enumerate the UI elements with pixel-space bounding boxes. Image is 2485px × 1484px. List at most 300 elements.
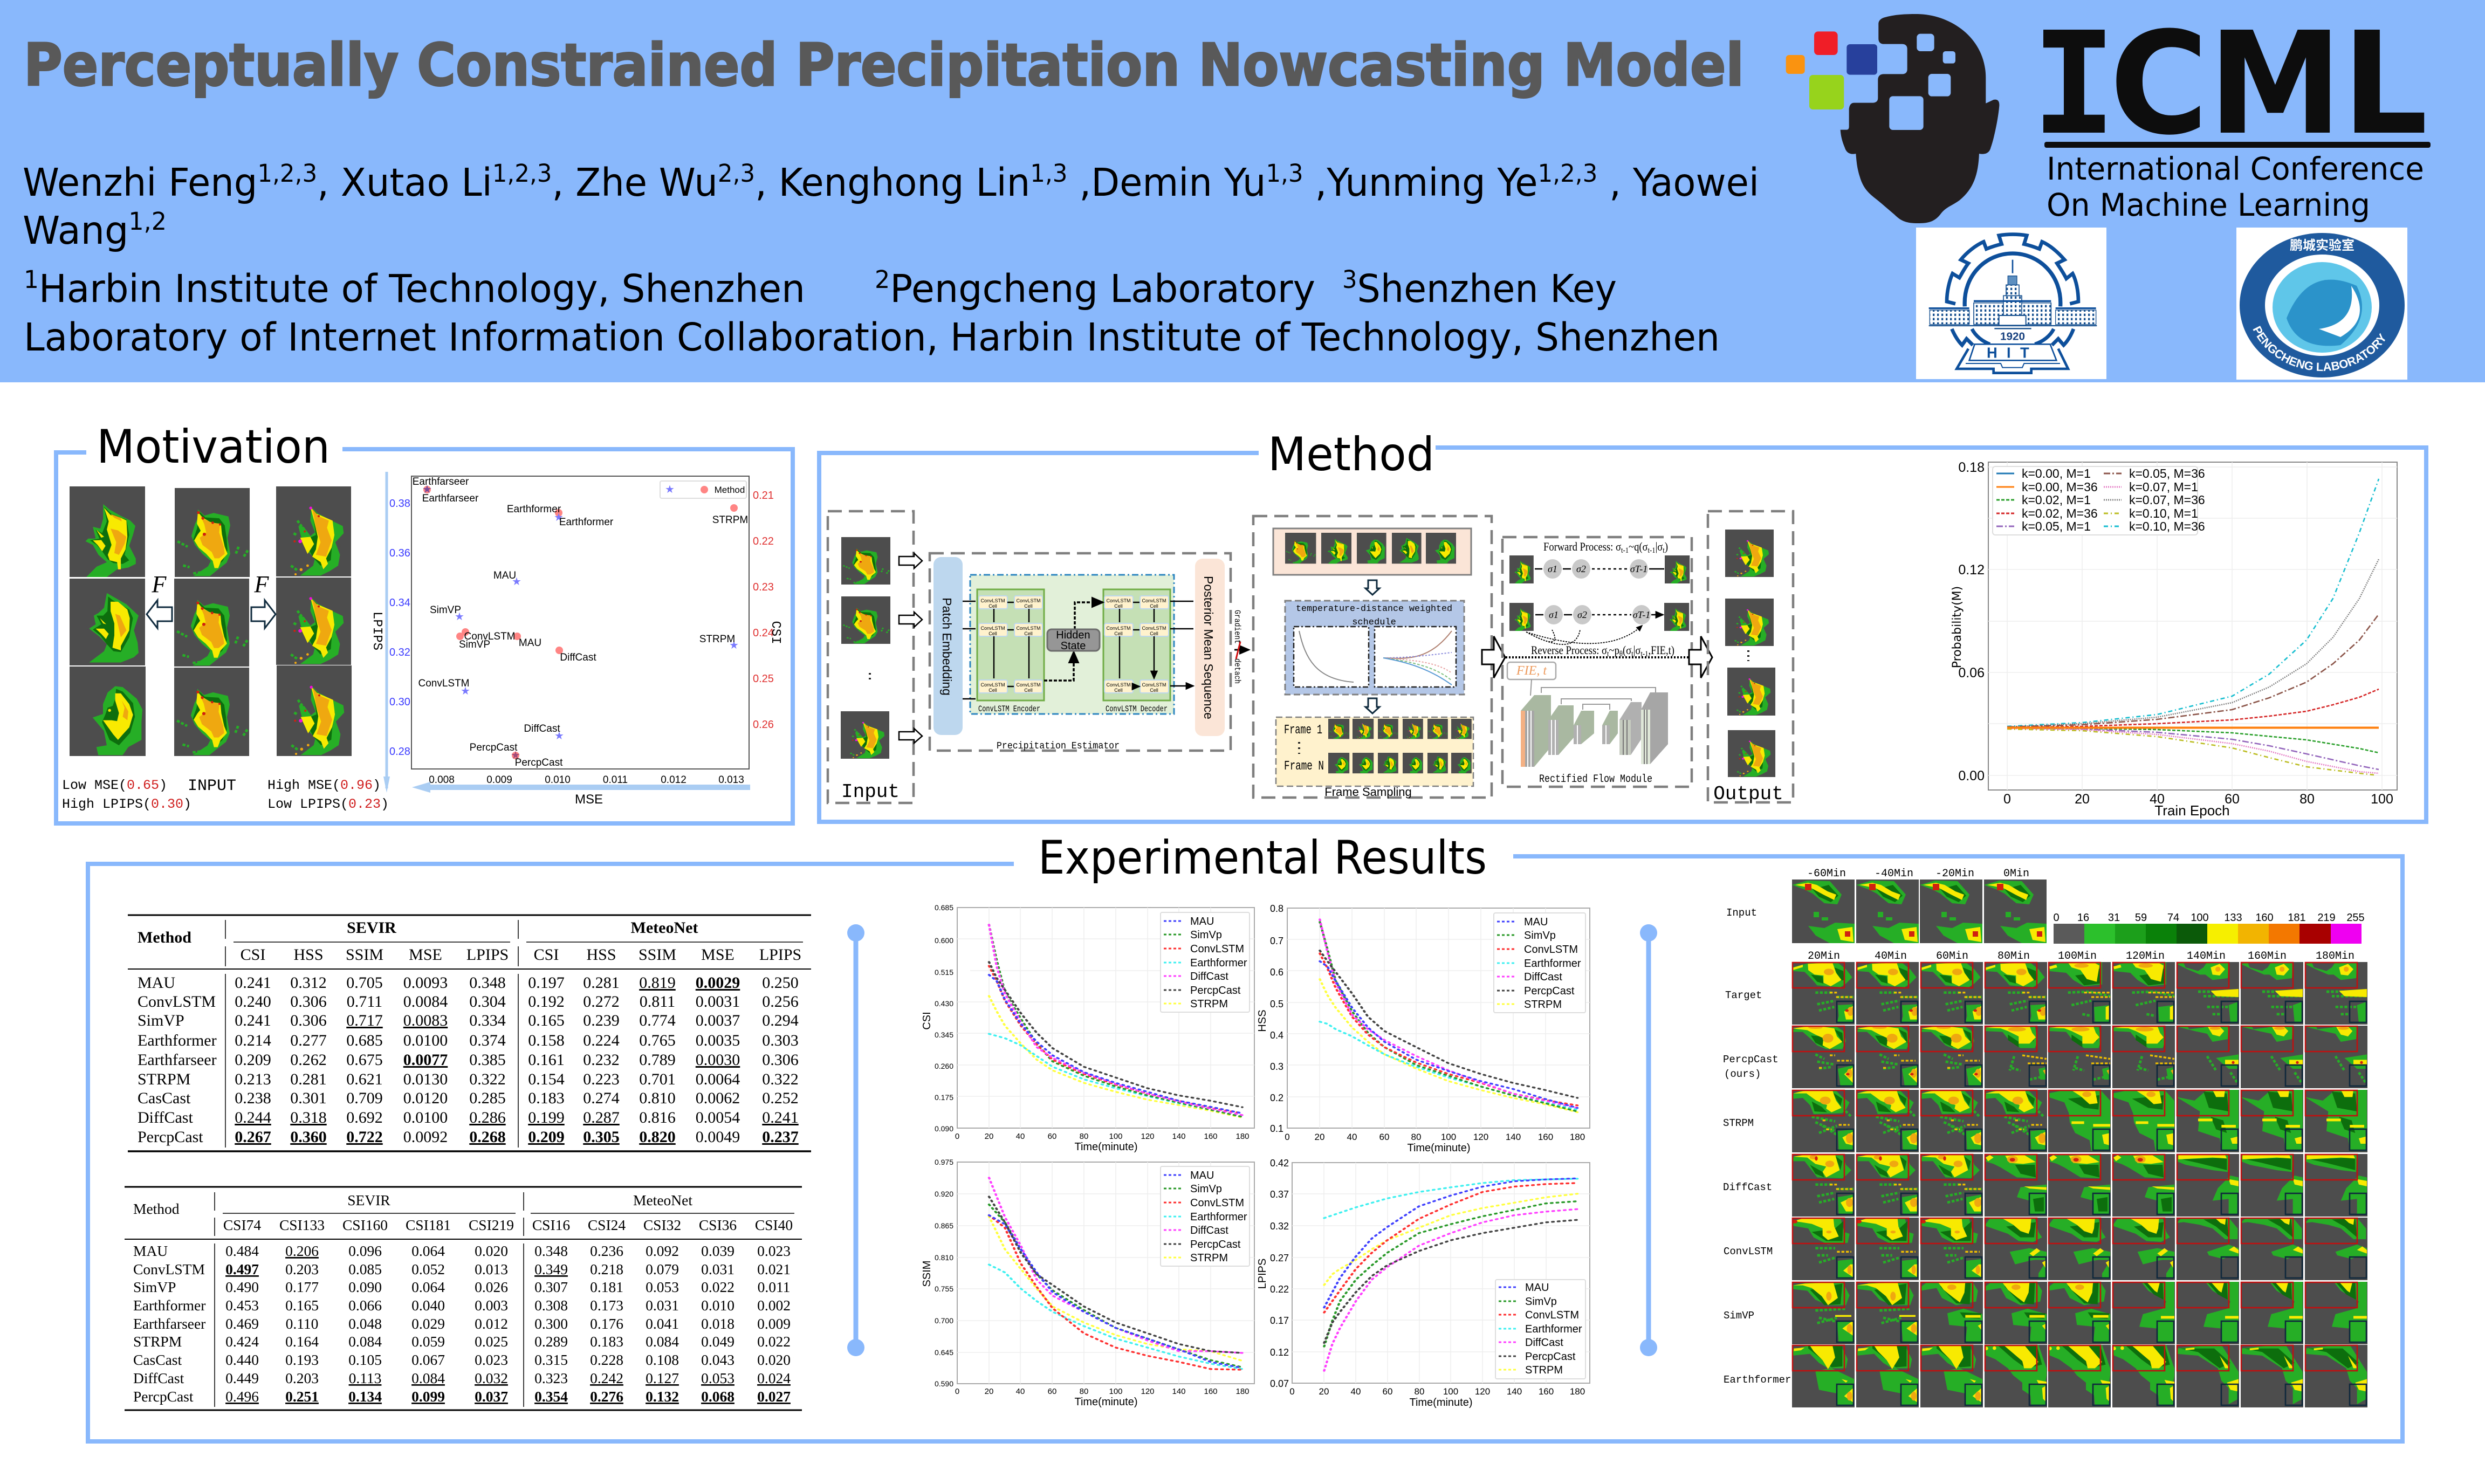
line chart: HSS — [1257, 903, 1590, 1154]
row MAU: MAU — [133, 1242, 168, 1259]
line chart: SSIM: 40 — [1016, 1387, 1025, 1396]
legend: Earthformer — [1190, 957, 1247, 969]
row SimVP: 0.294 — [762, 1012, 799, 1029]
row MAU: 0.096 — [348, 1242, 382, 1259]
row SimVP: 0.026 — [475, 1279, 508, 1295]
precipitation estimator: ConvLSTM — [980, 682, 1005, 688]
affiliations: Pengcheng Laboratory — [890, 266, 1315, 311]
legend: SimVp — [1190, 929, 1222, 941]
row ConvLSTM: 0.0031 — [696, 993, 740, 1011]
colorbar legend — [2053, 912, 2365, 944]
rectified flow module: t — [1663, 546, 1665, 555]
row STRPM: 0.025 — [475, 1333, 508, 1350]
arrow down — [1365, 580, 1379, 595]
scatter chart: MSE vs LPIPS and CSI: 0.21 — [753, 490, 774, 501]
column labels: -40Min — [1875, 868, 1913, 880]
row Earthfarseer: 0.029 — [411, 1315, 445, 1332]
legend: PercpCast — [1190, 1239, 1241, 1251]
input frames row — [1792, 880, 2047, 943]
authors: , Kenghong Lin — [755, 160, 1030, 205]
legend: Earthformer — [1524, 958, 1581, 970]
line chart: CSI: 180 — [1235, 1132, 1250, 1141]
line chart: HSS: 0.4 — [1270, 1030, 1283, 1041]
precipitation estimator: ConvLSTM — [980, 626, 1005, 631]
row labels: Target — [1725, 990, 1762, 1001]
scatter chart: MSE vs LPIPS and CSI: ★ — [554, 512, 564, 524]
row Earthfarseer: 0.0077 — [403, 1051, 448, 1069]
captions: MSE and LPIPS scores: Low LPIPS(0.23) — [267, 796, 389, 812]
row: Target — [1792, 962, 2367, 1025]
table 2 header: CSI24 — [588, 1217, 626, 1233]
line chart: SSIM: 0 — [955, 1387, 959, 1396]
legend: ConvLSTM — [1190, 1197, 1244, 1209]
row ConvLSTM: 0.218 — [590, 1261, 623, 1277]
arrows in estimator — [963, 601, 1193, 699]
row Earthfarseer: 0.789 — [639, 1051, 676, 1069]
rectified flow module: t-1 — [1640, 650, 1648, 658]
legend: MAU — [1190, 1170, 1214, 1181]
row Earthformer: 0.303 — [762, 1032, 799, 1049]
affiliations: 3 — [1342, 265, 1357, 294]
scatter chart: MSE vs LPIPS and CSI: ★ — [455, 611, 464, 623]
row Earthformer: 0.308 — [534, 1297, 568, 1314]
row Earthfarseer: 0.161 — [528, 1051, 565, 1069]
colorbar legend: 0 — [2053, 912, 2060, 924]
authors: ,Demin Yu — [1068, 160, 1266, 205]
row DiffCast: 0.286 — [469, 1109, 506, 1126]
hidden state — [1047, 629, 1100, 652]
line chart: SSIM: 20 — [985, 1387, 993, 1396]
captions: MSE and LPIPS scores: Low MSE(0.65) — [62, 778, 167, 793]
scatter chart: MSE vs LPIPS and CSI: DiffCast — [560, 652, 596, 663]
row ConvLSTM: 0.013 — [475, 1261, 508, 1277]
colorbar legend: 219 — [2317, 912, 2336, 924]
legend: DiffCast — [1525, 1337, 1563, 1349]
scatter chart: MSE vs LPIPS and CSI: 0.36 — [389, 547, 410, 559]
line chart: HSS: 20 — [1315, 1132, 1324, 1142]
row PercpCast: 0.132 — [646, 1388, 679, 1405]
row Earthformer: 0.003 — [475, 1297, 508, 1314]
column labels: 120Min — [2126, 950, 2165, 963]
line chart: HSS: 0.8 — [1270, 903, 1283, 914]
row PercpCast: PercpCast — [133, 1388, 194, 1405]
line chart: SSIM: 0.920 — [935, 1190, 953, 1198]
row Earthformer: 0.158 — [528, 1032, 565, 1049]
row MAU: 0.092 — [646, 1242, 679, 1259]
line chart: probability over training epochs: Train Epoch — [2154, 802, 2230, 819]
legend: SimVp — [1524, 930, 1556, 942]
row CasCast: 0.023 — [475, 1351, 508, 1368]
legend — [1993, 466, 2205, 535]
row Earthfarseer: 0.675 — [346, 1051, 383, 1069]
row Earthformer: 0.031 — [646, 1297, 679, 1314]
legend: k=0.05, M=36 — [2129, 466, 2205, 480]
table 1 header: CSI — [534, 946, 559, 964]
row ConvLSTM — [133, 1261, 791, 1277]
row SimVP: 0.239 — [583, 1012, 620, 1029]
row Earthfarseer: 0.306 — [762, 1051, 799, 1069]
row: SimVP — [1792, 1282, 2367, 1344]
column labels: 40Min — [1875, 950, 1907, 963]
row DiffCast — [133, 1370, 791, 1386]
row PercpCast: 0.360 — [290, 1128, 327, 1146]
authors: , Xutao Li — [317, 160, 492, 205]
row DiffCast: 0.053 — [701, 1370, 734, 1386]
row Earthformer: Earthformer — [138, 1032, 217, 1049]
row MAU: 0.705 — [346, 974, 383, 992]
authors: , Yaowei — [1597, 160, 1759, 205]
legend: k=0.02, M=36 — [2022, 506, 2098, 520]
icon: Pengcheng Laboratory logo: 鹏城实验室 — [2290, 235, 2354, 253]
row MAU: 0.020 — [475, 1242, 508, 1259]
row MAU: 0.023 — [757, 1242, 791, 1259]
precipitation estimator: Cell — [1114, 631, 1123, 636]
row Earthfarseer: 0.232 — [583, 1051, 620, 1069]
row CasCast: 0.183 — [528, 1089, 565, 1107]
row ConvLSTM — [138, 993, 799, 1011]
line chart: HSS: 0.2 — [1270, 1093, 1283, 1103]
legend: k=0.05, M=1 — [2022, 519, 2091, 533]
scatter chart: MSE vs LPIPS and CSI: 0.22 — [753, 535, 774, 547]
legend — [1495, 1280, 1585, 1379]
line chart: probability over training epochs: 0 — [2003, 792, 2011, 807]
line chart: HSS: 40 — [1347, 1132, 1357, 1142]
legend: MAU — [1524, 916, 1548, 928]
row SimVP: SimVP — [133, 1279, 176, 1295]
row MAU: 0.348 — [469, 974, 506, 992]
rectified flow module: t — [1607, 650, 1609, 658]
legend: k=0.10, M=36 — [2129, 519, 2205, 533]
row CasCast: 0.020 — [757, 1351, 791, 1368]
scatter chart: MSE vs LPIPS and CSI: ★ — [729, 640, 739, 651]
authors: Wenzhi Feng — [23, 160, 265, 205]
authors: 1,3 — [1030, 159, 1068, 188]
precipitation estimator: ConvLSTM — [1016, 682, 1041, 688]
gradient detach: Gradient — [1232, 610, 1242, 644]
rectified flow module: Rectified Flow Module — [1539, 773, 1652, 786]
line chart: SSIM: 0.810 — [935, 1253, 953, 1262]
colorbar legend: 133 — [2224, 912, 2242, 924]
authors: 1,2 — [128, 207, 167, 236]
row DiffCast: 0.0100 — [403, 1109, 448, 1126]
scatter chart: MSE vs LPIPS and CSI: 0.010 — [545, 774, 571, 786]
line chart: LPIPS: 120 — [1475, 1386, 1490, 1397]
row CasCast: CasCast — [138, 1089, 191, 1107]
scatter chart: MSE vs LPIPS and CSI: STRPM — [699, 634, 735, 645]
row SimVP: SimVP — [138, 1012, 184, 1029]
scatter chart: MSE vs LPIPS and CSI: ★ — [665, 484, 675, 496]
row Earthfarseer: 0.0030 — [696, 1051, 740, 1069]
table 1 header: CSI — [241, 946, 265, 964]
row PercpCast: 0.037 — [475, 1388, 508, 1405]
row DiffCast: 0.287 — [583, 1109, 620, 1126]
arrow to rectified flow — [1482, 636, 1505, 678]
affiliations: Harbin Institute of Technology, Shenzhen — [39, 266, 805, 311]
row ConvLSTM: 0.085 — [348, 1261, 382, 1277]
row PercpCast — [138, 1128, 799, 1146]
line chart: HSS: 140 — [1506, 1132, 1521, 1142]
row SimVP: 0.181 — [590, 1279, 623, 1295]
line chart: LPIPS: 0.22 — [1270, 1284, 1289, 1295]
colorbar legend: 74 — [2167, 912, 2179, 924]
scatter chart: MSE vs LPIPS and CSI: 0.009 — [486, 774, 512, 786]
scatter chart: MSE vs LPIPS and CSI: SimVP — [430, 604, 461, 616]
row labels: DiffCast — [1723, 1181, 1772, 1193]
row STRPM — [138, 1070, 799, 1088]
line chart: CSI: 80 — [1080, 1132, 1088, 1141]
precipitation estimator: ConvLSTM — [1106, 598, 1131, 603]
row Earthfarseer: 0.048 — [348, 1315, 382, 1332]
colorbar legend: 181 — [2288, 912, 2306, 924]
row PercpCast: PercpCast — [138, 1128, 203, 1146]
row CasCast: 0.252 — [762, 1089, 799, 1107]
row STRPM: 0.424 — [225, 1333, 259, 1350]
precipitation estimator: Cell — [988, 688, 997, 693]
row PercpCast: 0.305 — [583, 1128, 620, 1146]
row labels: PercpCast — [1723, 1054, 1779, 1066]
row MAU: 0.281 — [583, 974, 620, 992]
scatter chart: MSE vs LPIPS and CSI: 0.012 — [661, 774, 687, 786]
line chart: LPIPS: 180 — [1570, 1386, 1585, 1397]
captions: MSE and LPIPS scores — [62, 777, 389, 812]
row STRPM: 0.289 — [534, 1333, 568, 1350]
line chart: LPIPS: 0.32 — [1270, 1221, 1289, 1232]
line chart: LPIPS: 80 — [1415, 1386, 1424, 1397]
line chart: HSS: 0.1 — [1270, 1123, 1283, 1134]
row: DiffCast — [1792, 1154, 2367, 1217]
line chart: probability over training epochs — [1951, 460, 2397, 819]
row Earthfarseer: 0.209 — [235, 1051, 271, 1069]
row MAU: 0.348 — [534, 1242, 568, 1259]
line chart: SSIM: 0.755 — [935, 1284, 953, 1293]
hidden state: State — [1061, 640, 1086, 652]
row Earthfarseer: 0.012 — [475, 1315, 508, 1332]
legend: MAU — [1190, 916, 1214, 927]
legend: ConvLSTM — [1525, 1309, 1579, 1321]
row ConvLSTM: ConvLSTM — [138, 993, 216, 1011]
rectified flow module: Forward Process: σ — [1543, 540, 1636, 553]
precipitation estimator: Cell — [988, 603, 997, 609]
table 1 header: LPIPS — [759, 946, 801, 964]
legend: DiffCast — [1524, 971, 1562, 983]
table 1 header: SSIM — [346, 946, 383, 964]
scatter chart: MSE vs LPIPS and CSI: 0.24 — [753, 627, 774, 639]
rectified flow module: σ1 — [1549, 609, 1559, 620]
line chart: LPIPS: 100 — [1443, 1386, 1458, 1397]
line chart: SSIM: 140 — [1172, 1387, 1186, 1396]
legend: k=0.07, M=36 — [2129, 493, 2205, 507]
row CasCast: 0.105 — [348, 1351, 382, 1368]
row SimVP: 0.0083 — [403, 1012, 448, 1029]
row SimVP — [138, 1012, 799, 1029]
row CasCast: 0.810 — [639, 1089, 676, 1107]
row SimVP: 0.241 — [235, 1012, 271, 1029]
legend — [1161, 1166, 1250, 1266]
line chart: HSS: 180 — [1570, 1132, 1585, 1142]
scatter chart: MSE vs LPIPS and CSI: MAU — [519, 637, 541, 649]
row ConvLSTM: 0.240 — [235, 993, 271, 1011]
scatter chart: MSE vs LPIPS and CSI: ConvLSTM — [464, 631, 516, 642]
row Earthformer: 0.0100 — [403, 1032, 448, 1049]
line chart: probability over training epochs: 0.06 — [1958, 665, 1985, 681]
row CasCast: CasCast — [133, 1351, 182, 1368]
legend: DiffCast — [1190, 1225, 1228, 1236]
row CasCast: 0.440 — [225, 1351, 259, 1368]
table 1: overall metrics: Method — [138, 929, 191, 946]
line chart: LPIPS: Time(minute) — [1409, 1397, 1473, 1409]
table 2: CSI thresholds: MeteoNet — [633, 1192, 692, 1208]
precipitation estimator: Cell — [1114, 688, 1123, 693]
line chart: LPIPS: 0.27 — [1270, 1253, 1289, 1263]
icon: Pengcheng Laboratory logo — [2236, 228, 2407, 380]
rectified flow module: Reverse Process: σ — [1531, 643, 1621, 657]
precipitation estimator: Cell — [1024, 603, 1033, 609]
rectified flow module: σ1 — [1548, 564, 1557, 574]
precipitation estimator — [930, 553, 1231, 752]
rectified flow module: θ — [1619, 650, 1623, 658]
line chart: HSS: 0.5 — [1270, 999, 1283, 1009]
row MAU: 0.064 — [411, 1242, 445, 1259]
legend — [1494, 913, 1585, 1013]
row SimVP: 0.0037 — [696, 1012, 740, 1029]
row Earthformer: 0.277 — [290, 1032, 327, 1049]
row STRPM: 0.154 — [528, 1070, 565, 1088]
line chart: SSIM: 160 — [1204, 1387, 1218, 1396]
row STRPM: STRPM — [138, 1070, 190, 1088]
row Earthformer: 0.173 — [590, 1297, 623, 1314]
row Earthfarseer — [133, 1315, 791, 1332]
title: Perceptually Constrained Precipitation Nowcasting Model — [24, 32, 1744, 99]
table 2 header: CSI219 — [469, 1217, 514, 1233]
colorbar legend: 31 — [2108, 912, 2120, 924]
legend: STRPM — [1190, 1252, 1228, 1264]
table 1 header: HSS — [293, 946, 324, 964]
legend: PercpCast — [1190, 985, 1241, 997]
row MAU: MAU — [138, 974, 175, 992]
table 2 header: CSI40 — [755, 1217, 793, 1233]
row SimVP: 0.022 — [701, 1279, 734, 1295]
line chart: probability over training epochs: Probability(M) — [1951, 586, 1964, 668]
row Earthformer: 0.453 — [225, 1297, 259, 1314]
row Earthfarseer: 0.469 — [225, 1315, 259, 1332]
row DiffCast: 0.024 — [757, 1370, 791, 1386]
row ConvLSTM: 0.031 — [701, 1261, 734, 1277]
authors: 1,2,3 — [492, 159, 552, 188]
line chart: probability over training epochs: 80 — [2299, 792, 2315, 807]
column labels: -60Min — [1807, 868, 1846, 880]
row SimVP: 0.334 — [469, 1012, 506, 1029]
precipitation estimator: Cell — [1024, 631, 1033, 636]
affiliations: 1 — [24, 265, 39, 294]
icon: HIT logo: HIT — [1987, 344, 2038, 361]
scatter chart: MSE vs LPIPS and CSI: ★ — [422, 484, 432, 496]
line chart: CSI: 100 — [1109, 1132, 1123, 1141]
row ConvLSTM: 0.203 — [285, 1261, 319, 1277]
scatter chart: MSE vs LPIPS and CSI: 0.28 — [389, 746, 410, 758]
row STRPM: 0.223 — [583, 1070, 620, 1088]
line chart: SSIM: 120 — [1141, 1387, 1155, 1396]
rectified flow module: σ2 — [1576, 564, 1586, 574]
row Earthfarseer: Earthfarseer — [138, 1051, 217, 1069]
line chart: probability over training epochs: 20 — [2075, 792, 2090, 807]
row ConvLSTM: 0.711 — [347, 993, 382, 1011]
scatter chart: MSE vs LPIPS and CSI: STRPM — [712, 514, 748, 526]
row Earthfarseer: 0.009 — [757, 1315, 791, 1332]
row CasCast: 0.0062 — [696, 1089, 740, 1107]
line chart: HSS: 0.7 — [1270, 936, 1283, 946]
row PercpCast: 0.251 — [285, 1388, 319, 1405]
row CasCast: 0.238 — [235, 1089, 271, 1107]
affiliations: Shenzhen Key — [1357, 266, 1617, 311]
row labels — [1723, 907, 1791, 1386]
rectified flow module: t — [1631, 650, 1633, 658]
scatter chart: MSE vs LPIPS and CSI: DiffCast — [524, 723, 560, 734]
line chart: SSIM: 0.645 — [935, 1348, 953, 1357]
row MAU: 0.0029 — [696, 974, 740, 992]
precipitation estimator: Cell — [988, 631, 997, 636]
row CasCast — [133, 1351, 791, 1368]
row DiffCast: 0.0054 — [696, 1109, 740, 1126]
row Earthformer — [138, 1032, 799, 1049]
line chart: LPIPS: 20 — [1319, 1386, 1329, 1397]
row PercpCast: 0.820 — [639, 1128, 676, 1146]
row DiffCast: 0.323 — [534, 1370, 568, 1386]
colorbar legend: 59 — [2135, 912, 2147, 924]
precipitation estimator: Cell — [1150, 603, 1158, 609]
line chart: probability over training epochs: 0.12 — [1958, 562, 1985, 578]
row labels: ConvLSTM — [1724, 1246, 1773, 1258]
column labels: -20Min — [1935, 868, 1974, 880]
column labels: 180Min — [2316, 950, 2354, 963]
row STRPM: 0.0130 — [403, 1070, 448, 1088]
line chart: HSS: 160 — [1538, 1132, 1553, 1142]
row DiffCast: 0.449 — [225, 1370, 259, 1386]
row DiffCast: 0.113 — [349, 1370, 381, 1386]
precipitation estimator: ConvLSTM — [1142, 598, 1166, 603]
row PercpCast: 0.237 — [762, 1128, 799, 1146]
line chart: CSI: 0.430 — [935, 999, 953, 1008]
temperature-distance weighted schedule — [1285, 601, 1464, 695]
column labels: 100Min — [2058, 950, 2097, 963]
row MAU: 0.312 — [290, 974, 327, 992]
line chart: CSI: 0 — [955, 1132, 959, 1141]
line chart: CSI: 60 — [1048, 1132, 1056, 1141]
line chart: LPIPS: LPIPS — [1257, 1259, 1268, 1289]
temperature-distance weighted schedule: schedule — [1352, 617, 1396, 628]
row labels: Input — [1726, 907, 1757, 919]
authors: , Zhe Wu — [552, 160, 718, 205]
row CasCast: 0.301 — [290, 1089, 327, 1107]
row SimVP: 0.774 — [639, 1012, 676, 1029]
line chart: CSI: 40 — [1016, 1132, 1025, 1141]
U-Net blocks — [1521, 679, 1668, 767]
heading: Method: Method — [1268, 428, 1434, 482]
authors — [23, 159, 1759, 253]
captions: MSE and LPIPS scores: INPUT — [188, 777, 236, 795]
line chart: HSS: 0 — [1285, 1132, 1290, 1142]
row Earthfarseer: 0.176 — [590, 1315, 623, 1332]
row CasCast: 0.228 — [590, 1351, 623, 1368]
frame strip: Frame 1 — [1284, 723, 1322, 738]
row MAU — [133, 1242, 791, 1259]
rectified flow module: |σ — [1656, 540, 1663, 553]
scatter chart: MSE vs LPIPS and CSI: Earthfarseer — [422, 493, 479, 504]
precipitation estimator: Cell — [1114, 603, 1123, 609]
operator arrows F: F — [152, 571, 167, 597]
scatter chart: MSE vs LPIPS and CSI: ConvLSTM — [418, 678, 470, 689]
authors: 1,3 — [1266, 159, 1303, 188]
line chart: LPIPS: 0.07 — [1270, 1378, 1289, 1389]
